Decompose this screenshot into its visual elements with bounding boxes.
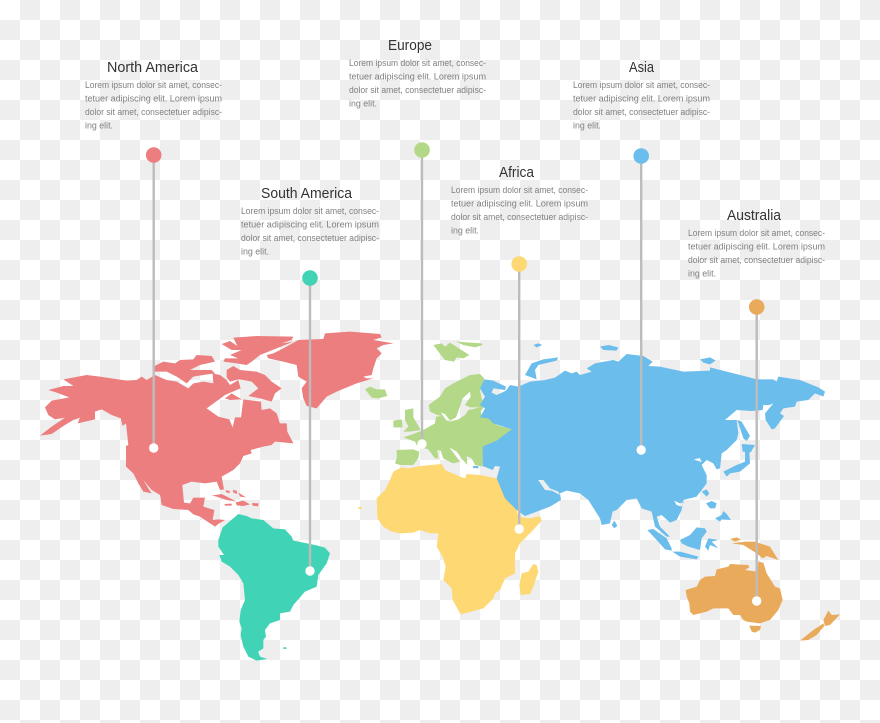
text block: Africa [451, 165, 588, 236]
text block: Australia: Australia [727, 208, 782, 224]
text block: Australia: ing elit. [688, 268, 716, 278]
pin: Australia [749, 299, 764, 606]
text block: Africa: tetuer adipiscing elit. Lorem ipsum [451, 198, 588, 208]
text block: South America [241, 186, 379, 256]
pin: Asia [633, 148, 649, 455]
pin: Europe [414, 142, 430, 449]
text block: Australia: dolor sit amet, consectetuer adipisc- [688, 255, 825, 265]
continent: Asia [473, 343, 825, 559]
text block: Africa: dolor sit amet, consectetuer adipisc- [451, 212, 588, 222]
pin: Africa [511, 256, 527, 534]
text block: Europe: dolor sit amet, consectetuer adipisc- [349, 85, 486, 95]
text block: Asia: dolor sit amet, consectetuer adipisc- [573, 107, 710, 117]
text block: Europe: Lorem ipsum dolor sit amet, consec- [349, 58, 486, 68]
continent: South America [218, 514, 330, 661]
continent: Africa [358, 464, 542, 614]
continent: Europe [365, 342, 512, 467]
pin: North America [146, 147, 162, 453]
text block: Australia: Lorem ipsum dolor sit amet, consec- [688, 228, 825, 238]
pin: South America [302, 270, 318, 576]
text block: Australia: tetuer adipiscing elit. Lorem ipsum [688, 242, 825, 252]
text block: South America: South America [261, 186, 353, 202]
text block: North America: North America [107, 60, 199, 76]
continent: North America [40, 332, 393, 527]
text block: Europe: Europe [388, 38, 432, 54]
text block: North America: Lorem ipsum dolor sit amet, consec- [85, 80, 222, 90]
text block: Asia: tetuer adipiscing elit. Lorem ipsum [573, 94, 710, 104]
text block: Australia [688, 208, 825, 278]
text block: Europe: ing elit. [349, 98, 377, 108]
text block: South America: tetuer adipiscing elit. Lorem ipsum [241, 220, 379, 230]
text block: South America: dolor sit amet, consectetuer adipisc- [241, 233, 379, 243]
continent: Australia [686, 537, 840, 641]
world map [40, 332, 840, 661]
text block: Africa: ing elit. [451, 226, 479, 236]
text block: Europe: tetuer adipiscing elit. Lorem ipsum [349, 72, 486, 82]
text block: North America: ing elit. [85, 120, 113, 130]
text block: North America: dolor sit amet, consectetuer adipisc- [85, 107, 222, 117]
text block: South America: Lorem ipsum dolor sit amet, consec- [241, 206, 379, 216]
text block: Africa: Lorem ipsum dolor sit amet, consec- [451, 185, 588, 195]
text block: North America [85, 60, 222, 130]
text block: Asia: Asia [629, 60, 655, 76]
text block: Europe [349, 38, 486, 108]
text block: North America: tetuer adipiscing elit. Lorem ipsum [85, 94, 222, 104]
text block: South America: ing elit. [241, 246, 269, 256]
text block: Asia [573, 60, 710, 130]
text block: Asia: ing elit. [573, 120, 601, 130]
text block: Africa: Africa [499, 165, 535, 181]
text block: Asia: Lorem ipsum dolor sit amet, consec- [573, 80, 710, 90]
